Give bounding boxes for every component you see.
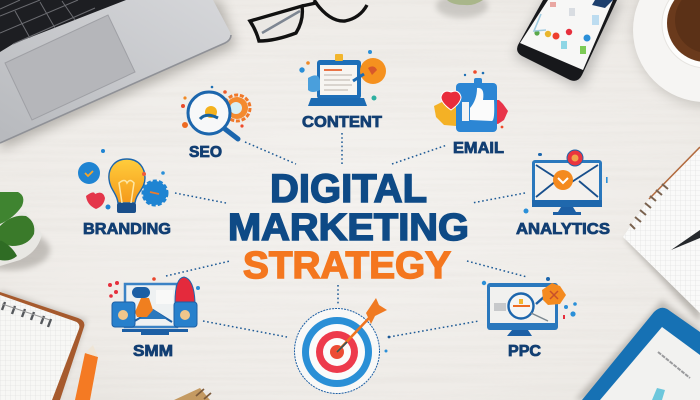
- label: ANALYTICS: ANALYTICS: [516, 221, 610, 238]
- notebook, lower left: [0, 290, 87, 400]
- icon: analytics envelope monitor: [524, 150, 608, 215]
- icon: email thumbs up: [434, 70, 508, 132]
- label: EMAIL: EMAIL: [453, 140, 504, 157]
- label: CONTENT: CONTENT: [302, 114, 382, 131]
- title: [228, 167, 469, 287]
- icon: content monitor: [299, 50, 386, 106]
- icon: SEO magnifier and gear: [181, 86, 250, 139]
- title line: STRATEGY: STRATEGY: [243, 245, 451, 287]
- icon: SMM social screen: [108, 277, 200, 335]
- dotted connectors: [166, 133, 527, 337]
- icon: target with arrow: [294, 298, 390, 394]
- label: PPC: PPC: [508, 343, 541, 360]
- label: BRANDING: BRANDING: [83, 221, 171, 238]
- title line: DIGITAL: DIGITAL: [270, 167, 427, 211]
- title line: MARKETING: MARKETING: [228, 207, 469, 249]
- icon: branding light bulb: [78, 149, 167, 213]
- spiral notepad at bottom: [174, 388, 211, 400]
- label: SMM: SMM: [133, 343, 173, 360]
- pen: [671, 230, 700, 250]
- icon: PPC monitor and lens: [482, 277, 577, 336]
- potted plant: [0, 192, 50, 270]
- small plant at top: [436, 0, 488, 18]
- laptop: [0, 0, 236, 150]
- smartphone: [514, 0, 622, 88]
- orange pen: [75, 345, 98, 400]
- coffee cup and saucer: [633, 0, 700, 106]
- tablet: [575, 300, 700, 400]
- glasses: [250, 0, 367, 41]
- notebook, right: [623, 147, 700, 322]
- label: SEO: SEO: [189, 144, 222, 161]
